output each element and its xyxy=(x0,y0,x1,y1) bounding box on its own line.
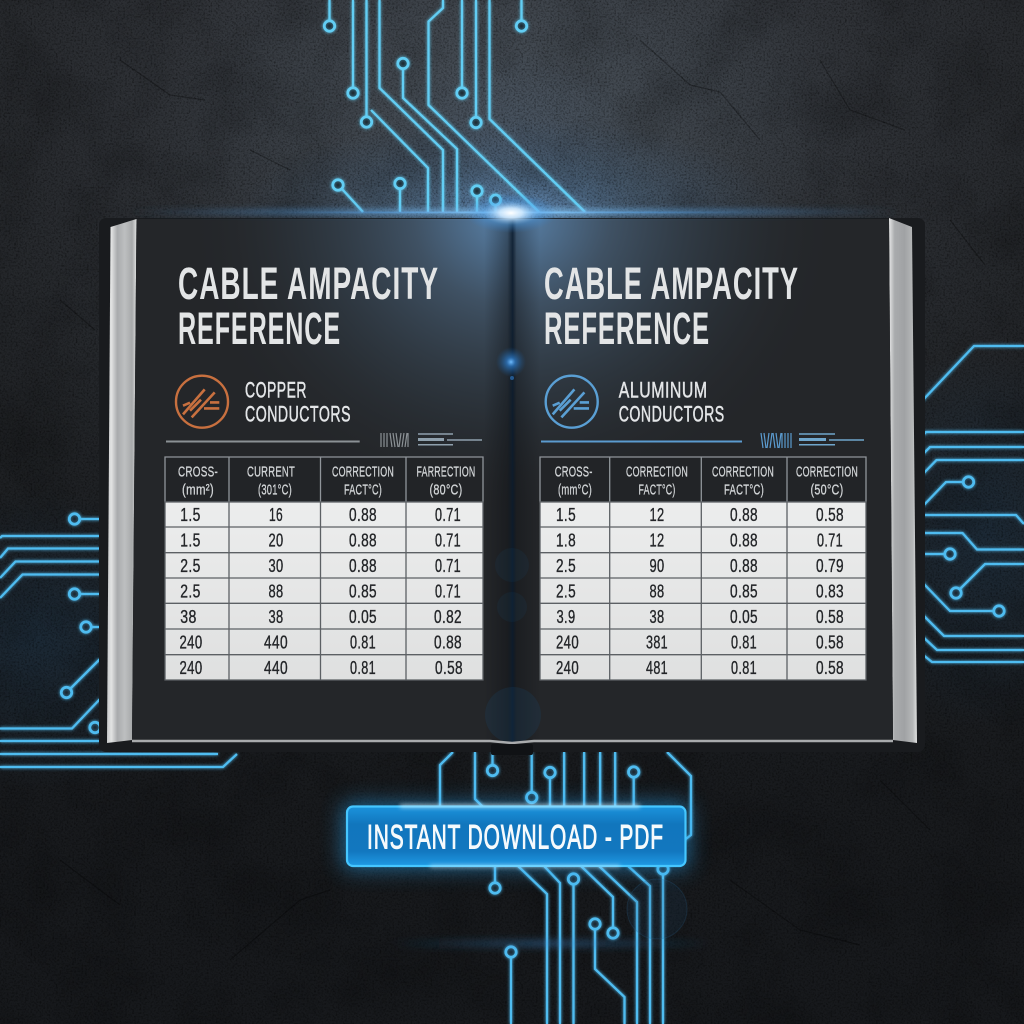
copper table body: 0.85 xyxy=(349,581,377,601)
aluminum table body: 0.05 xyxy=(730,607,758,627)
aluminum table body: 0.81 xyxy=(731,633,757,653)
icon: aluminum conductor xyxy=(546,376,598,428)
copper table body: 38 xyxy=(180,607,197,627)
copper table body: 0.71 xyxy=(435,505,461,525)
icon: copper conductor xyxy=(176,376,228,428)
bokeh and light streak near the bottom xyxy=(390,879,710,946)
aluminum conductors heading xyxy=(619,378,725,426)
copper table body xyxy=(165,502,483,680)
aluminum table header: FACT°C) xyxy=(724,481,764,498)
copper table body: 2.5 xyxy=(180,581,201,601)
top glow along the book edge xyxy=(130,193,900,233)
copper table body: 16 xyxy=(269,505,283,525)
aluminum table body: 0.79 xyxy=(816,556,844,576)
aluminum table body: 0.83 xyxy=(816,581,844,601)
copper table body: 1.5 xyxy=(180,531,201,551)
copper table body: 0.71 xyxy=(435,531,461,551)
copper table body: 240 xyxy=(180,658,202,678)
copper table body: 0.88 xyxy=(349,556,377,576)
copper table body: 0.81 xyxy=(350,633,376,653)
copper table body: 440 xyxy=(264,658,288,678)
book pages xyxy=(130,215,895,745)
aluminum divider with coil and wire glyphs xyxy=(541,433,864,448)
copper table header: CORRECTION xyxy=(332,464,394,480)
copper table body: 20 xyxy=(268,531,284,551)
aluminum table body: 0.58 xyxy=(816,607,844,627)
copper table body: 0.71 xyxy=(435,556,461,576)
right page block edge xyxy=(889,218,917,743)
aluminum table body: 1.8 xyxy=(556,531,576,551)
copper table body: 38 xyxy=(268,607,284,627)
copper table body: 0.71 xyxy=(435,581,461,601)
copper table header: FACT°C) xyxy=(344,481,382,498)
copper table body: 30 xyxy=(268,556,284,576)
copper table body: 440 xyxy=(264,633,288,653)
aluminum table body: 12 xyxy=(650,505,664,525)
copper conductors heading: CONDUCTORS xyxy=(245,402,351,426)
left page title xyxy=(178,258,439,354)
aluminum table body: 2.5 xyxy=(556,581,576,601)
aluminum table body: 0.58 xyxy=(816,633,844,653)
copper table body: 0.88 xyxy=(349,505,377,525)
aluminum table body: 2.5 xyxy=(556,556,576,576)
aluminum conductors heading: ALUMINUM xyxy=(619,378,708,402)
aluminum table body: 90 xyxy=(650,556,664,576)
right page title: REFERENCE xyxy=(544,303,710,354)
bottom page edge xyxy=(132,741,893,743)
aluminum table body: 0.71 xyxy=(817,531,843,551)
copper table header: (mm²) xyxy=(182,481,214,498)
copper table body: 240 xyxy=(180,633,202,653)
copper table body: 0.88 xyxy=(349,531,377,551)
aluminum conductors heading: CONDUCTORS xyxy=(619,402,725,426)
button: instant download: INSTANT DOWNLOAD - PDF xyxy=(367,818,664,856)
table: copper conductors xyxy=(165,457,483,680)
aluminum table header: (mm°C) xyxy=(558,481,592,498)
circuit traces: top xyxy=(324,0,585,212)
aluminum table body: 0.88 xyxy=(730,556,758,576)
aluminum table header xyxy=(540,457,866,502)
aluminum table body: 0.88 xyxy=(730,531,758,551)
button: instant download xyxy=(342,802,690,870)
aluminum table header: CROSS- xyxy=(555,464,593,480)
aluminum table header: CORRECTION xyxy=(712,464,774,480)
copper table header: CROSS- xyxy=(178,464,218,480)
copper table header: FARRECTION xyxy=(416,464,476,480)
aluminum table body: 1.5 xyxy=(556,505,576,525)
copper table body: 2.5 xyxy=(180,556,201,576)
right page title: CABLE AMPACITY xyxy=(544,258,799,309)
copper table body: 88 xyxy=(268,581,284,601)
copper table body: 1.5 xyxy=(180,505,201,525)
book cover xyxy=(99,218,925,752)
copper table header: (301°C) xyxy=(258,481,292,498)
aluminum table body: 0.85 xyxy=(730,581,758,601)
aluminum table body: 0.88 xyxy=(730,505,758,525)
aluminum table body: 240 xyxy=(556,658,579,678)
copper table body: 0.81 xyxy=(350,658,376,678)
aluminum table body: 481 xyxy=(646,658,668,678)
open book xyxy=(99,193,925,755)
circuit traces: right xyxy=(922,346,1024,662)
aluminum table body: 240 xyxy=(556,633,579,653)
aluminum table body: 0.58 xyxy=(816,658,844,678)
copper conductors heading: COPPER xyxy=(245,378,307,402)
aluminum table body: 3.9 xyxy=(556,607,576,627)
spine tab xyxy=(491,744,533,755)
aluminum table header: CORRECTION xyxy=(796,464,858,480)
left page title: REFERENCE xyxy=(178,303,341,354)
copper divider with coil and wire glyphs xyxy=(166,433,482,447)
aluminum table body: 12 xyxy=(650,531,664,551)
left page title: CABLE AMPACITY xyxy=(178,258,439,309)
aluminum table body: 0.81 xyxy=(731,658,757,678)
circuit traces: left xyxy=(0,514,237,767)
aluminum table header: (50°C) xyxy=(810,481,844,498)
aluminum table header: FACT°C) xyxy=(638,481,676,498)
copper table body: 0.05 xyxy=(349,607,377,627)
copper table body: 0.58 xyxy=(435,658,463,678)
copper table body: 0.82 xyxy=(434,607,462,627)
copper table body: 0.88 xyxy=(434,633,462,653)
aluminum table body: 0.58 xyxy=(816,505,844,525)
aluminum table header: CORRECTION xyxy=(626,464,688,480)
left page block edge xyxy=(107,219,136,743)
circuit traces: bottom xyxy=(440,752,691,1024)
aluminum table body: 38 xyxy=(650,607,664,627)
aluminum table body xyxy=(540,502,866,680)
copper table header: CURRENT xyxy=(247,464,295,480)
aluminum table body: 381 xyxy=(646,633,668,653)
copper table header: (80°C) xyxy=(430,481,462,498)
table: aluminum conductors xyxy=(540,457,866,680)
right page title xyxy=(544,258,799,354)
copper table header xyxy=(165,457,483,502)
aluminum table body: 88 xyxy=(650,581,664,601)
copper conductors heading xyxy=(245,378,351,426)
